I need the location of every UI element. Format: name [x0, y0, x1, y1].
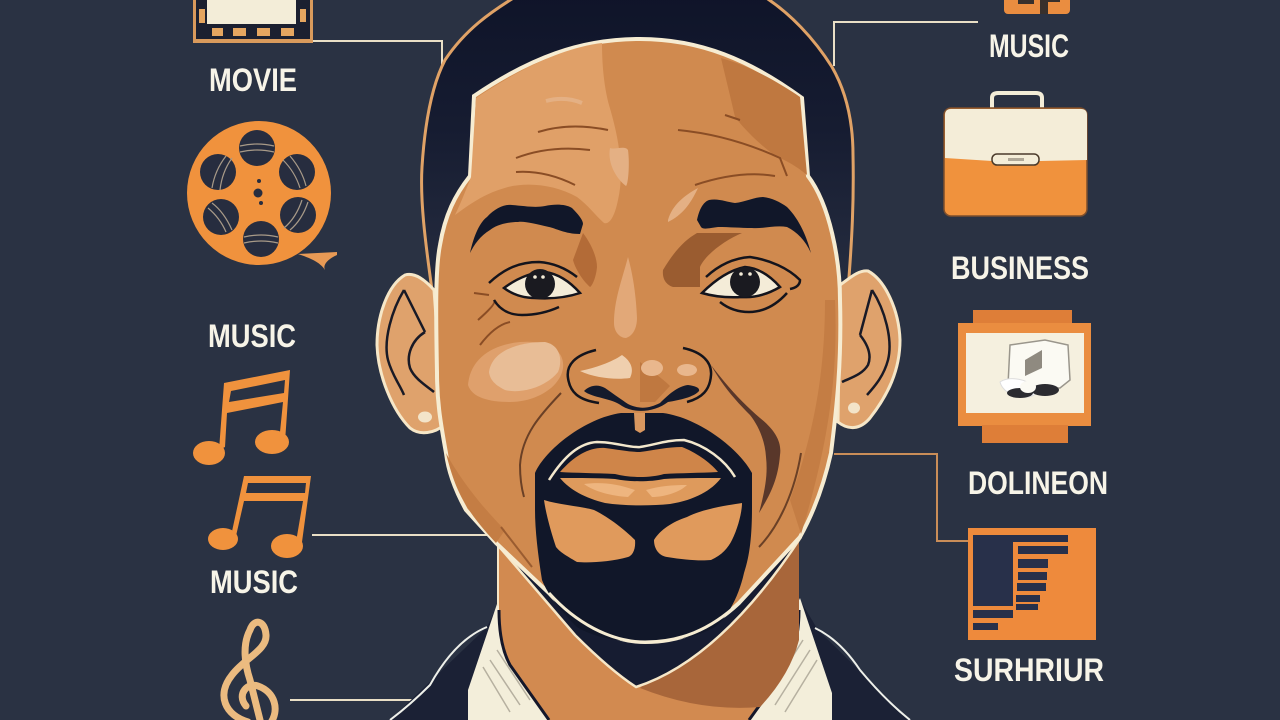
- cheek creases: [501, 365, 801, 567]
- panel: left column: [187, 0, 337, 720]
- label: business: BUSINESS: [951, 250, 1089, 286]
- icon: music top: [1004, 0, 1070, 14]
- forehead lines: [474, 115, 787, 345]
- icon: bar chart panel: [968, 528, 1096, 640]
- collar: [468, 598, 832, 720]
- label: surhriur: SURHRIUR: [954, 652, 1104, 688]
- label: dolineon: DOLINEON: [968, 465, 1108, 501]
- eyes: [489, 257, 800, 315]
- hair: [422, 0, 853, 290]
- eyebrows: [470, 197, 811, 253]
- label: music: MUSIC: [208, 318, 296, 354]
- nose: [568, 348, 711, 411]
- label: music lower: MUSIC: [210, 564, 298, 600]
- panel: right column: [944, 0, 1108, 688]
- icon: monitor with notes: [958, 310, 1091, 443]
- face: [436, 39, 840, 642]
- label: movie: MOVIE: [209, 62, 297, 98]
- icon: film frame: [193, 0, 313, 43]
- connector lines: [290, 22, 978, 700]
- icon: film reel: [187, 121, 337, 270]
- portrait: [377, 0, 910, 720]
- icon: briefcase: [944, 93, 1087, 216]
- neck: [496, 535, 801, 720]
- icon: beamed notes: [193, 370, 290, 465]
- skin shading: [446, 43, 836, 543]
- jacket: [390, 600, 910, 720]
- icon: beamed notes small: [208, 476, 311, 558]
- left ear: [377, 274, 444, 433]
- label: music: MUSIC: [989, 28, 1069, 64]
- icon: treble clef: [224, 622, 275, 720]
- goatee and mouth: [535, 413, 752, 642]
- right ear: [838, 271, 900, 428]
